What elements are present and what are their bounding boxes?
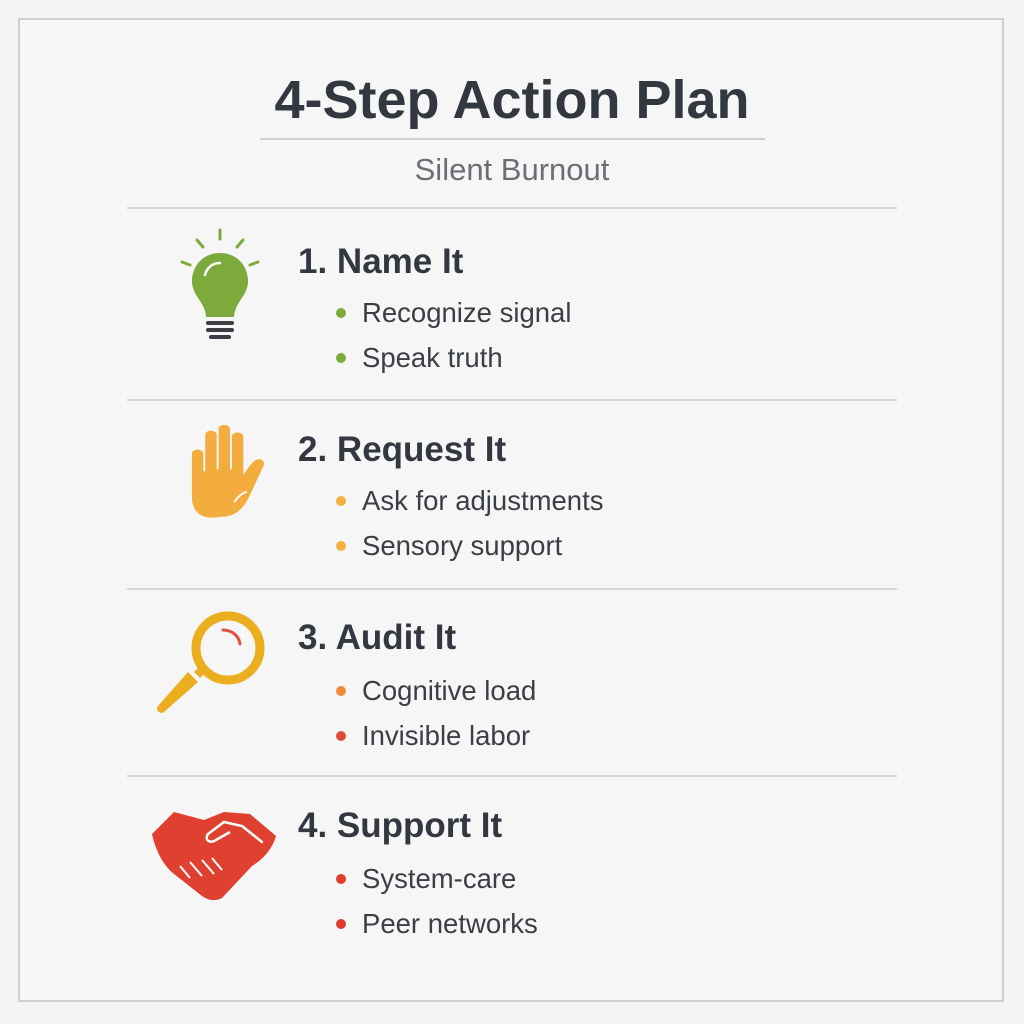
section 2: Request It: Sensory support <box>362 530 562 561</box>
bullets: Cognitive load <box>362 675 536 706</box>
section 2: Request It <box>192 424 603 561</box>
bullets: System-care <box>362 863 516 894</box>
section 4: Support It <box>152 806 538 939</box>
section 1: Name It <box>180 228 571 373</box>
section 1: Name It: Speak truth <box>362 342 503 373</box>
bullets: Ask for adjustments <box>362 485 603 516</box>
icon: magnifier <box>157 612 264 713</box>
title: 4-Step Action Plan <box>274 70 750 130</box>
heading: 3. Audit It <box>298 618 456 657</box>
icon: handshake <box>152 812 276 900</box>
heading: 4. Support It <box>298 806 502 845</box>
section 3: Audit It <box>157 612 536 751</box>
icon: hand <box>192 424 264 518</box>
section 3: Audit It: Invisible labor <box>362 720 530 751</box>
section 4: Support It: Peer networks <box>362 908 538 939</box>
bullets: Recognize signal <box>362 297 571 328</box>
heading: 2. Request It <box>298 430 506 469</box>
icon: lightbulb <box>180 228 260 339</box>
subtitle: Silent Burnout <box>415 152 609 187</box>
heading: 1. Name It <box>298 242 463 281</box>
